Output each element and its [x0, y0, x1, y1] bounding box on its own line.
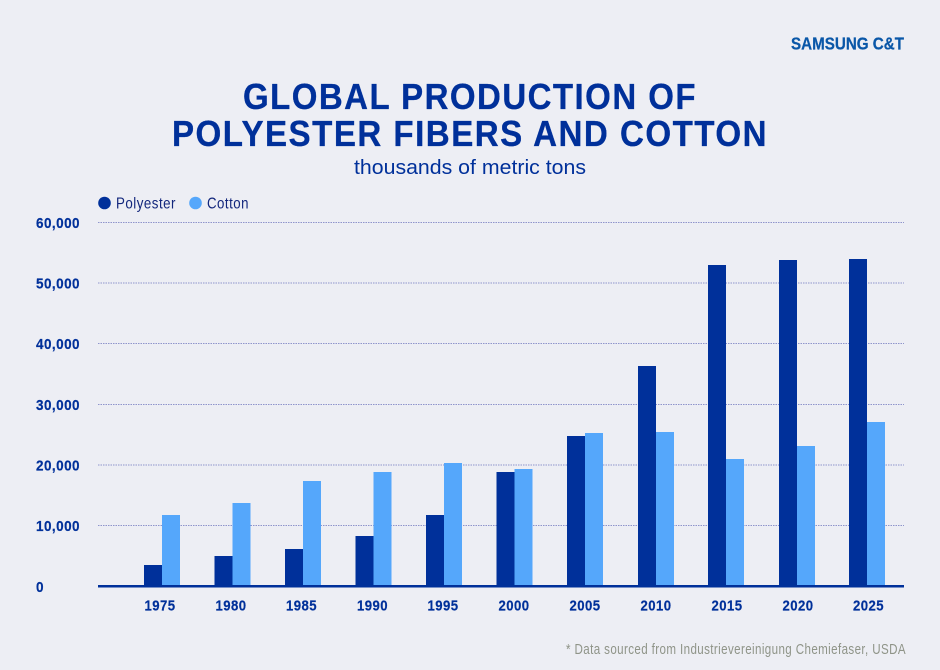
y-axis labels: 20,000	[36, 458, 80, 474]
y-axis labels: 10,000	[36, 518, 80, 535]
x-axis line	[98, 585, 904, 588]
legend	[98, 196, 249, 212]
title: GLOBAL PRODUCTION OF	[243, 76, 697, 117]
legend item: Cotton: Cotton	[207, 196, 249, 212]
legend item: Cotton	[189, 196, 249, 212]
logo: Samsung C&T: SAMSUNG C&T	[791, 34, 904, 54]
subtitle: thousands of metric tons	[354, 156, 586, 179]
x-axis labels: 1980	[216, 598, 246, 614]
legend item: Polyester	[98, 196, 176, 212]
x-axis labels: 2005	[570, 598, 600, 614]
x-axis labels: 2010	[640, 598, 672, 614]
x-axis labels	[144, 598, 884, 614]
y-axis labels: 50,000	[36, 276, 80, 292]
y-axis labels: 0	[36, 579, 44, 596]
legend item: Polyester: Polyester	[116, 196, 176, 212]
x-axis labels: 2020	[782, 598, 814, 614]
x-axis labels: 1995	[428, 598, 458, 614]
y-axis labels	[36, 215, 80, 596]
title	[172, 76, 768, 154]
x-axis labels: 1985	[286, 598, 317, 614]
bar chart	[144, 259, 885, 586]
polyester bars	[144, 259, 867, 586]
x-axis labels: 1975	[144, 598, 176, 614]
title: POLYESTER FIBERS AND COTTON	[172, 113, 768, 154]
cotton bars	[162, 422, 885, 586]
y-axis labels: 40,000	[36, 336, 80, 353]
grid lines	[98, 222, 904, 526]
x-axis labels: 2015	[712, 598, 742, 614]
x-axis labels: 1990	[357, 598, 388, 614]
x-axis labels: 2025	[853, 598, 884, 614]
x-axis labels: 2000	[498, 598, 530, 614]
y-axis labels: 30,000	[36, 397, 80, 414]
y-axis labels: 60,000	[36, 215, 80, 232]
